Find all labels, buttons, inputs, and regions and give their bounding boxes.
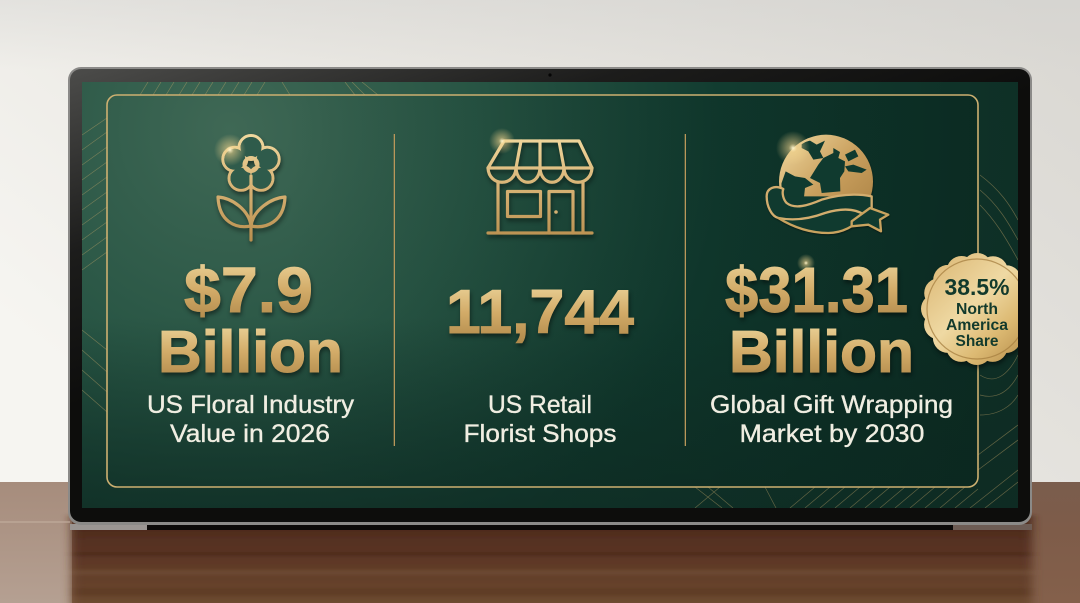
panel: floral industry	[147, 134, 355, 448]
label	[147, 391, 355, 448]
sparkle	[797, 254, 815, 272]
label: Market by 2030	[740, 420, 924, 448]
divider left	[394, 134, 395, 446]
label: US Floral Industry	[147, 391, 355, 419]
stat: $31.31 Billion: $31.31	[725, 254, 908, 326]
stat: $7.9 Billion: $7.9	[184, 254, 313, 326]
label	[710, 391, 953, 448]
callout: north america share badge: America	[946, 317, 1008, 334]
decorative corner lines	[82, 82, 1018, 508]
laptop display frame	[68, 67, 1032, 530]
stat: $7.9 Billion: Billion	[158, 319, 343, 385]
screen panel	[82, 82, 1018, 508]
callout: north america share badge: Share	[956, 333, 999, 350]
stat: $7.9 Billion	[158, 254, 343, 385]
callout: north america share badge: 38.5%	[944, 274, 1010, 300]
label: US Retail	[488, 391, 592, 419]
callout: north america share badge	[927, 259, 1027, 359]
label: Global Gift Wrapping	[710, 391, 953, 419]
stat: $31.31 Billion	[725, 254, 914, 385]
stat: $31.31 Billion: Billion	[729, 319, 914, 385]
callout: north america share badge: North	[956, 301, 998, 318]
label: Value in 2026	[170, 420, 330, 448]
sparkle	[776, 131, 810, 165]
label	[464, 391, 616, 448]
icon: globe with ribbon	[767, 135, 888, 233]
sparkle	[214, 134, 246, 166]
panel: gift wrapping market	[710, 131, 1027, 448]
label: Florist Shops	[464, 420, 616, 448]
sparkle	[489, 128, 515, 154]
icon: flower	[218, 136, 285, 240]
icon: storefront	[488, 141, 592, 233]
stat: 11,744: 11,744	[446, 278, 635, 347]
gold inner border	[107, 95, 978, 487]
divider right	[685, 134, 686, 446]
panel: florist shops	[446, 128, 635, 448]
wooden table	[0, 482, 1080, 603]
